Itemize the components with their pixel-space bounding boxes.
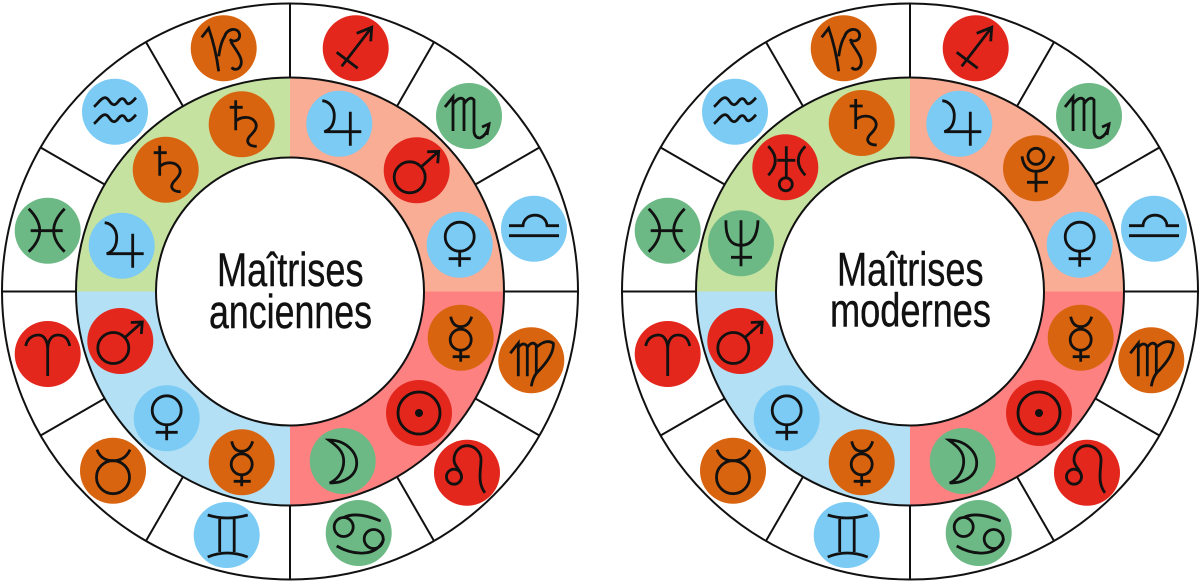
icon: saturn [829,90,895,156]
icon: scorpio [1056,83,1122,149]
icon: capricorn [811,15,877,81]
icon: moon [930,428,996,494]
outer disc [2,4,578,580]
icon: libra [1121,196,1187,262]
icon: cancer [326,500,392,566]
icon: mercury [209,429,275,495]
icon: leo [434,440,500,506]
icon: gemini [194,502,260,568]
ring quadrant: green [696,78,910,292]
icon: mars [707,308,773,374]
icon: uranus [752,134,818,200]
icon: mercury [1048,305,1114,371]
icon: saturn [209,91,275,157]
icon: venus [427,212,493,278]
icon: venus [754,385,820,451]
icon: neptune [708,210,774,276]
ring quadrant: salmon [910,78,1124,292]
title: Maîtrises modernes: Maîtrises [837,242,984,296]
outer disc [622,4,1198,580]
icon: pisces [635,198,701,264]
title: Maîtrises anciennes: Maîtrises [217,243,364,296]
icon: taurus [700,438,766,504]
icon: jupiter [89,213,155,279]
title: Maîtrises anciennes [209,243,372,338]
wheel: maîtrises modernes [622,4,1198,580]
icon: sagittarius [943,15,1009,81]
icon: sun [1006,380,1072,446]
icon: sagittarius [323,15,389,81]
title: Maîtrises modernes [830,242,991,336]
icon: venus [1047,212,1113,278]
icon: aries [15,321,81,387]
icon: saturn [133,137,199,203]
icon: taurus [80,438,146,504]
icon: aquarius [82,79,148,145]
icon: mercury [829,429,895,495]
icon: cancer [946,500,1012,566]
icon: venus [134,385,200,451]
icon: aries [635,321,701,387]
icon: mars [87,308,153,374]
icon: pluto [1003,135,1069,201]
icon: jupiter [306,91,372,157]
ring quadrant: pink [290,292,504,506]
icon: virgo [498,327,564,393]
icon: aquarius [702,79,768,145]
ring quadrant: salmon [290,78,504,292]
icon: libra [501,196,567,262]
icon: virgo [1118,327,1184,393]
icon: mercury [428,305,494,371]
ring quadrant: green [76,78,290,292]
icon: moon [310,428,376,494]
title: Maîtrises modernes: modernes [830,284,991,336]
icon: sun [386,380,452,446]
ring quadrant: pink [910,292,1124,506]
ring quadrant: light blue [696,292,910,506]
icon: mars [384,137,450,203]
wheel: maîtrises anciennes [2,4,578,580]
icon: scorpio [436,83,502,149]
icon: capricorn [191,15,257,81]
title: Maîtrises anciennes: anciennes [209,285,372,338]
icon: gemini [814,502,880,568]
icon: jupiter [926,91,992,157]
icon: pisces [15,198,81,264]
ring quadrant: light blue [76,292,290,506]
icon: leo [1054,440,1120,506]
